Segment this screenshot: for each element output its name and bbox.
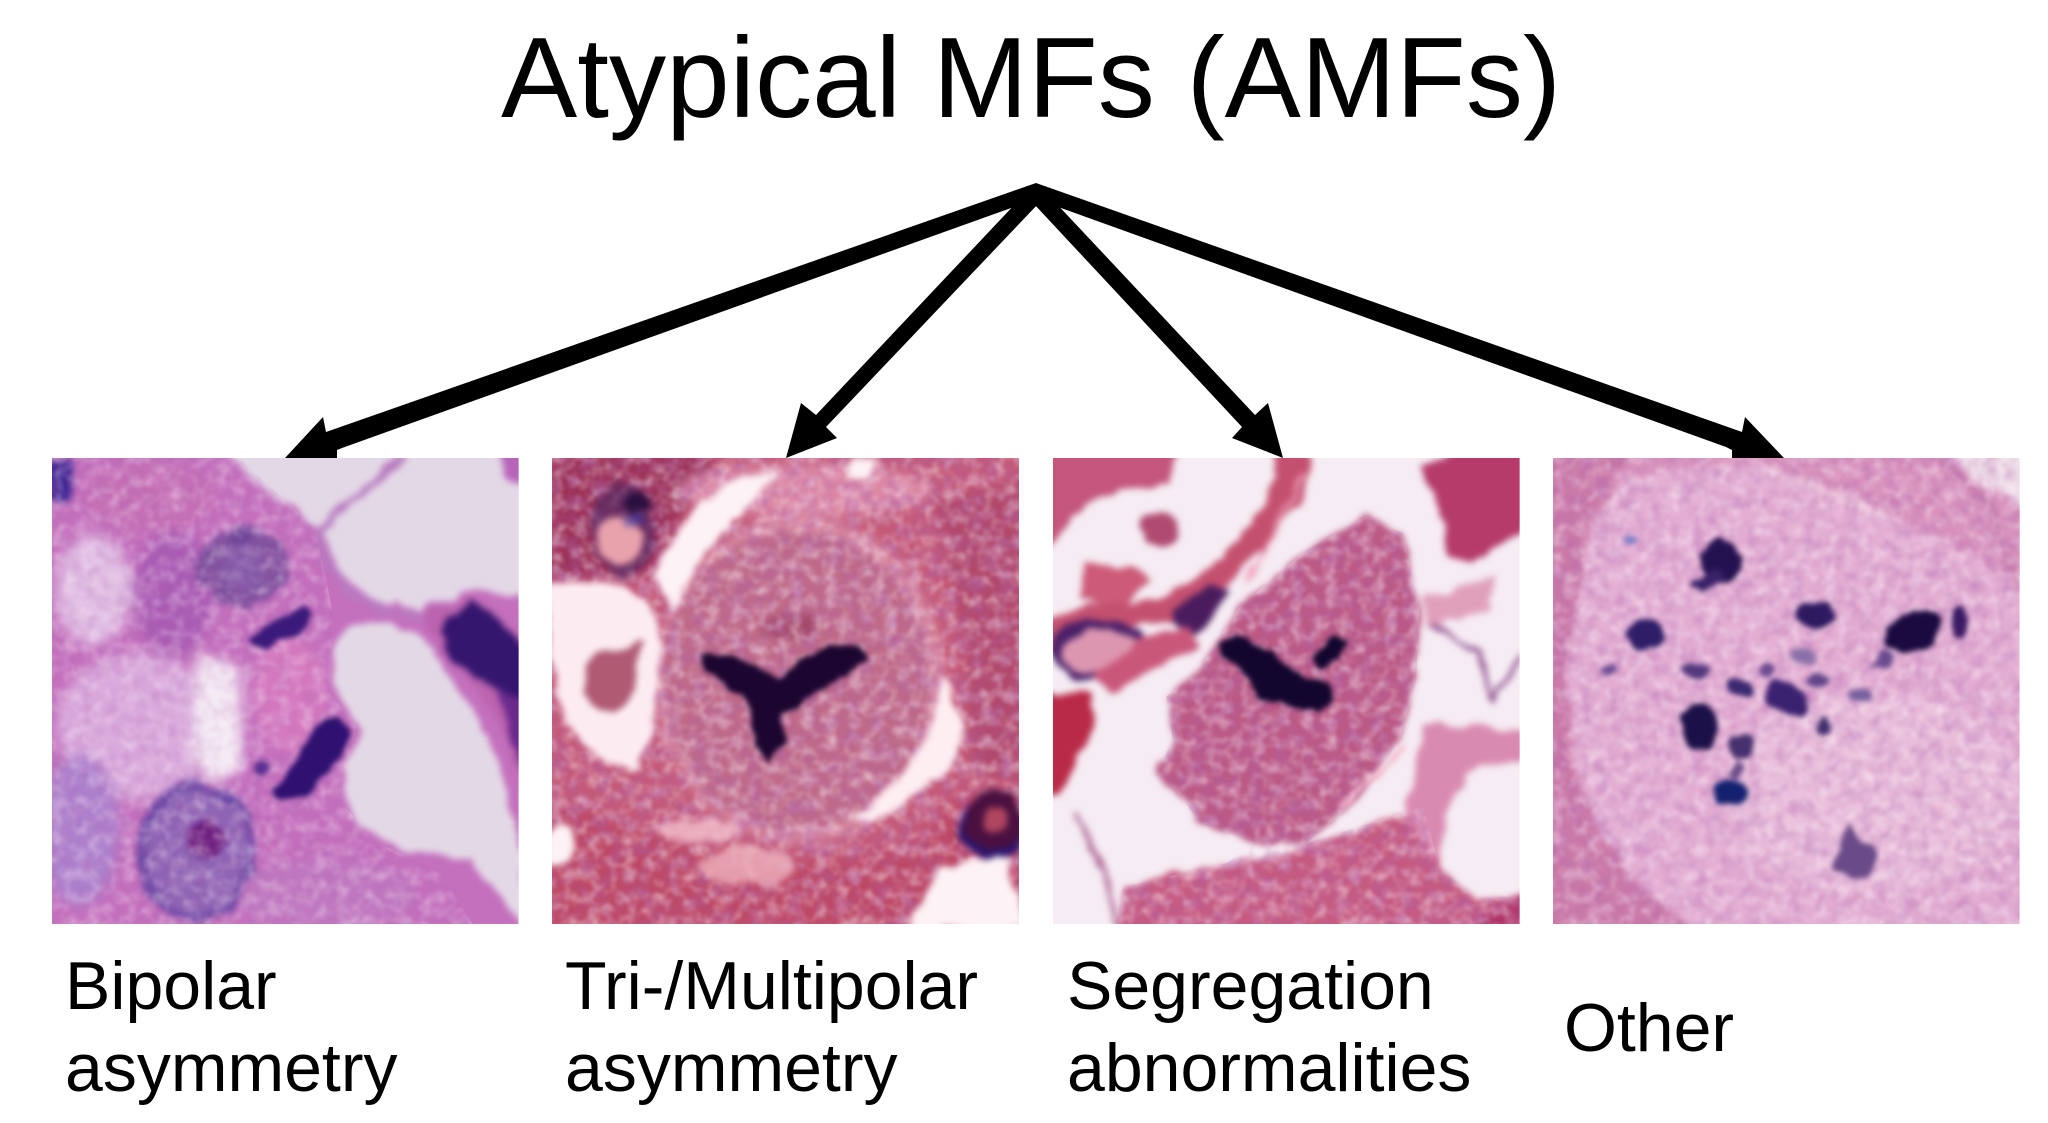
arrows from title to the four categories	[285, 183, 1784, 458]
label: bipolar asymmetry: Bipolar	[65, 948, 277, 1024]
label: tri-/multipolar asymmetry: asymmetry	[565, 1030, 897, 1106]
label: segregation abnormalities: abnormalities	[1067, 1030, 1471, 1106]
label: segregation abnormalities: Segregation	[1067, 948, 1434, 1024]
panel: bipolar asymmetry micrograph	[40, 447, 530, 933]
panel: segregation abnormalities micrograph	[1043, 447, 1530, 933]
arrow to bipolar asymmetry	[285, 183, 1036, 458]
arrow to segregation abnormalities	[1034, 184, 1283, 458]
label: bipolar asymmetry: asymmetry	[65, 1030, 397, 1106]
panel: tri-/multipolar asymmetry micrograph	[545, 453, 1030, 930]
title: Atypical MFs (AMFs)	[501, 15, 1561, 142]
arrow to other	[1036, 183, 1784, 458]
arrow to tri-/multipolar asymmetry	[786, 184, 1038, 458]
panel: other atypical mitosis micrograph	[1543, 447, 2030, 933]
label: other: Other	[1564, 990, 1734, 1066]
label: tri-/multipolar asymmetry: Tri-/Multipolar	[565, 948, 978, 1024]
